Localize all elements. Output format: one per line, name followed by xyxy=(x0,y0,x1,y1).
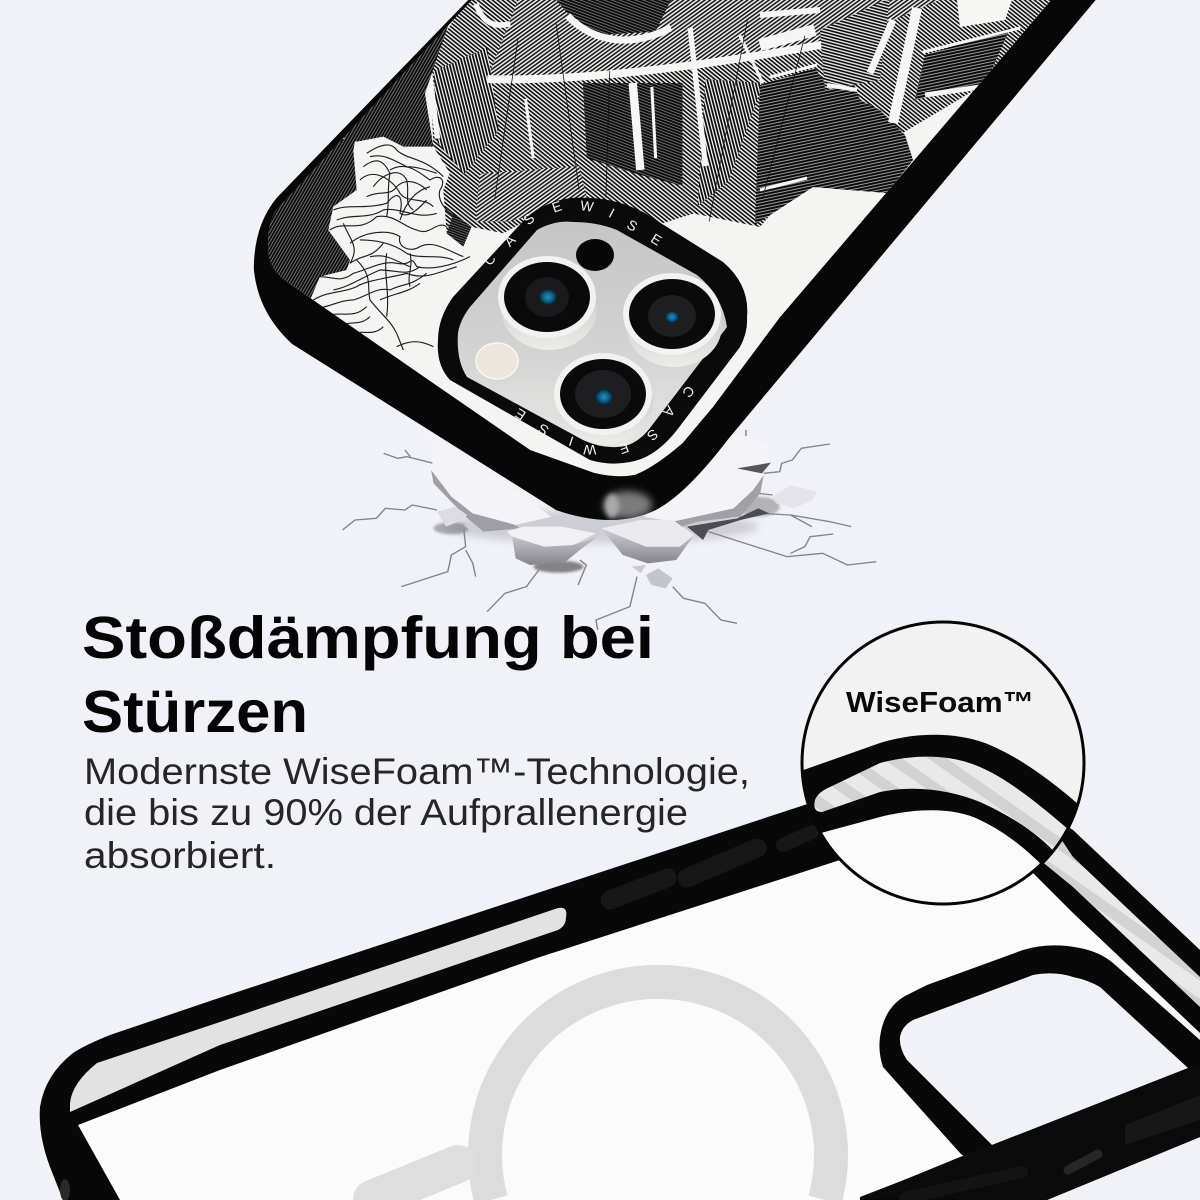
side foam strip right xyxy=(1040,830,1200,1007)
side foam strip left xyxy=(70,908,566,1112)
camera bumper ring xyxy=(438,198,747,464)
MagSafe alignment bar xyxy=(372,1164,458,1199)
heading: Stoßdämpfung bei xyxy=(82,605,654,671)
magnified case corner xyxy=(804,734,1077,864)
camera plateau xyxy=(458,222,727,447)
MagSafe ring xyxy=(485,982,831,1200)
flash xyxy=(476,343,518,379)
body text xyxy=(84,751,750,876)
magnifier background xyxy=(802,622,1084,904)
microphone hole xyxy=(576,239,614,271)
camera cutout frame xyxy=(879,945,1200,1160)
case corner highlight xyxy=(604,491,652,519)
body text: absorbiert. xyxy=(84,835,276,876)
heading xyxy=(82,605,654,745)
body text: Modernste WiseFoam™-Technologie, xyxy=(84,751,750,792)
magnifier label: WiseFoam™ xyxy=(846,687,1034,719)
magnifier circle xyxy=(795,622,1085,905)
body text: die bis zu 90% der Aufprallenergie xyxy=(84,792,688,833)
brand text on bumper top: CASEWISE xyxy=(480,197,665,269)
bottom band sheen xyxy=(1125,1095,1200,1145)
brand text on bumper bottom: CASEWISE xyxy=(512,383,698,458)
camera lens 2 xyxy=(623,273,722,367)
left corner dark hatching and hair lines xyxy=(250,20,472,350)
bottom case band xyxy=(860,1065,1200,1200)
top phone in protective case xyxy=(250,0,1097,520)
outer black frame xyxy=(40,754,1200,1200)
bottom case interior view xyxy=(40,754,1200,1200)
case body xyxy=(254,0,1097,520)
heading: Stürzen xyxy=(82,679,308,745)
clear back panel xyxy=(78,800,1200,1200)
magnifier outline xyxy=(802,622,1084,904)
lower-left speaker slot xyxy=(60,1179,70,1200)
right side artwork xyxy=(755,0,1020,225)
lower long slot xyxy=(905,1172,1022,1198)
side button slots xyxy=(610,832,812,900)
back glass with engraved artwork xyxy=(250,0,1092,490)
camera lens 3 xyxy=(554,353,653,444)
ground crack impact xyxy=(342,430,876,630)
camera lens 1 xyxy=(498,256,597,350)
lower button slot xyxy=(1068,1154,1098,1170)
camera cutout opening xyxy=(900,973,1188,1145)
